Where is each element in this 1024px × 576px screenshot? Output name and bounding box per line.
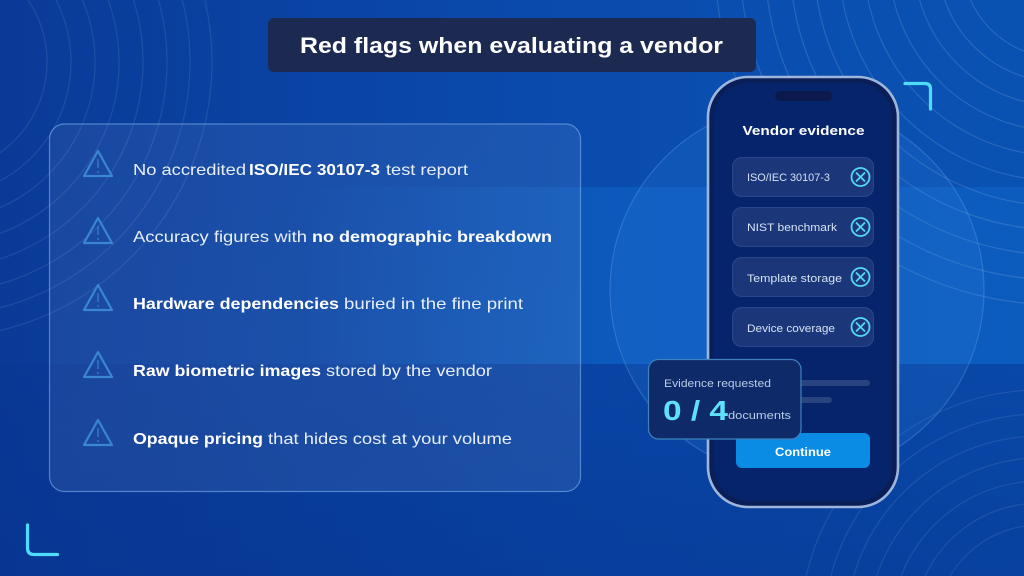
evidence row: ISO/IEC 30107-3	[732, 158, 874, 196]
flag 3: buried in the fine print	[344, 296, 524, 313]
flag 1: ISO/IEC 30107-3	[249, 162, 380, 179]
title: Red flags when evaluating a vendor	[300, 33, 723, 58]
flag 2: no demographic breakdown	[312, 229, 552, 246]
flag 5: that hides cost at your volume	[268, 431, 512, 448]
icon: x circle	[852, 318, 870, 336]
flag 2	[84, 218, 552, 246]
icon: warning triangle	[84, 285, 112, 310]
flag 4: Raw biometric images	[133, 363, 321, 380]
continue button	[736, 433, 870, 468]
phone notch	[775, 91, 832, 101]
flag 1: test report	[386, 162, 469, 179]
flag 3: Hardware dependencies	[133, 296, 339, 313]
evidence row: Device coverage	[732, 308, 874, 346]
icon: x circle	[852, 268, 870, 286]
icon: x circle	[852, 218, 870, 236]
icon: warning triangle	[84, 218, 112, 243]
evidence row: Template storage: Template storage	[747, 273, 842, 285]
callout: evidence requested: documents	[728, 410, 792, 422]
continue button: Continue	[775, 445, 831, 459]
evidence row: NIST benchmark: NIST benchmark	[747, 222, 838, 234]
callout: evidence requested	[648, 360, 801, 439]
flag 4: stored by the vendor	[326, 363, 493, 380]
flag 5	[84, 420, 512, 448]
flag 2: Accuracy figures with	[133, 229, 307, 246]
flag 5: Opaque pricing	[133, 431, 263, 448]
title	[268, 18, 756, 72]
callout: evidence requested: 0 / 4	[663, 395, 729, 426]
flag 4	[84, 352, 493, 380]
decorative large circle behind phone	[610, 103, 984, 477]
evidence row: NIST benchmark	[732, 208, 874, 246]
icon: corner bracket top right	[905, 84, 930, 109]
flag 1: No accredited	[133, 162, 246, 179]
icon: warning triangle	[84, 151, 112, 176]
panel: red flags	[50, 124, 580, 492]
callout: evidence requested: Evidence requested	[664, 378, 771, 390]
icon: x circle	[852, 168, 870, 186]
phone heading: Vendor evidence	[742, 123, 864, 138]
evidence row: ISO/IEC 30107-3: ISO/IEC 30107-3	[747, 172, 830, 184]
evidence row: Device coverage: Device coverage	[747, 323, 835, 335]
phone mockup	[708, 77, 898, 507]
icon: warning triangle	[84, 420, 112, 445]
placeholder lines	[790, 380, 870, 403]
evidence row: Template storage	[732, 258, 874, 296]
flag 3	[84, 285, 524, 313]
flag 1	[84, 151, 469, 179]
icon: warning triangle	[84, 352, 112, 377]
icon: corner bracket bottom left	[28, 525, 58, 554]
